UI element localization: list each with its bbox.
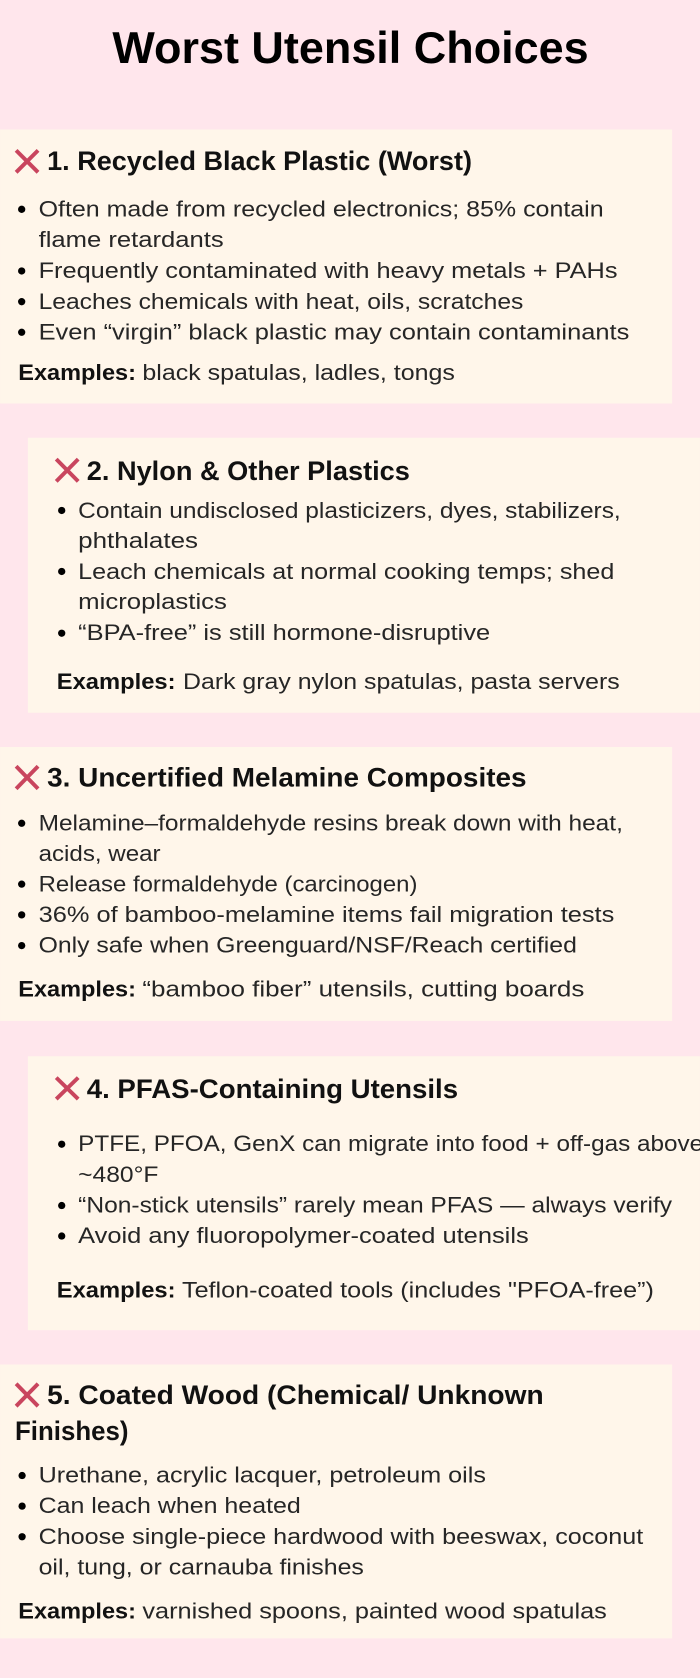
- panel: 5. coated wood: [0, 1364, 672, 1638]
- bullet list 5: Choose single-piece hardwood with beeswax, coconut: [39, 1524, 644, 1549]
- bullet list 3: Only safe when Greenguard/NSF/Reach certified: [39, 932, 577, 957]
- icon: red cross 4: [56, 1078, 78, 1099]
- heading 3: 3. Uncertified Melamine Composites: [47, 763, 527, 793]
- examples 1: [18, 360, 455, 385]
- heading 5: Finishes): [15, 1416, 128, 1446]
- heading 5: 5. Coated Wood (Chemical/ Unknown: [47, 1380, 544, 1410]
- icon: red cross 2: [56, 459, 78, 481]
- examples 3: Examples:: [18, 977, 136, 1002]
- icon: red cross 3: [16, 766, 38, 789]
- examples 5: varnished spoons, painted wood spatulas: [142, 1598, 607, 1623]
- panel: 2. nylon and other plastics: [28, 438, 700, 713]
- bullet list 5: oil, tung, or carnauba finishes: [39, 1555, 364, 1580]
- icon: red cross 1: [16, 150, 38, 172]
- bullet list 2: Leach chemicals at normal cooking temps; shed: [78, 559, 614, 584]
- bullet list 3: acids, wear: [39, 841, 161, 866]
- bullet list 3: Release formaldehyde (carcinogen): [39, 871, 417, 896]
- bullet list 4: Avoid any fluoropolymer-coated utensils: [78, 1223, 529, 1248]
- examples 3: “bamboo fiber” utensils, cutting boards: [142, 977, 584, 1002]
- panel: 3. uncertified melamine composites: [0, 747, 672, 1021]
- heading 5: [15, 1380, 544, 1446]
- bullet list 4: “Non-stick utensils” rarely mean PFAS — always verify: [78, 1192, 673, 1217]
- heading 1: 1. Recycled Black Plastic (Worst): [47, 146, 472, 176]
- bullet list 2: [58, 498, 621, 645]
- bullet list 1: Leaches chemicals with heat, oils, scratches: [39, 289, 523, 314]
- bullet list 3: [18, 810, 623, 957]
- bullet list 1: Often made from recycled electronics; 85% contain: [39, 197, 604, 222]
- bullet list 2: Contain undisclosed plasticizers, dyes, stabilizers,: [78, 498, 621, 523]
- examples 1: black spatulas, ladles, tongs: [142, 360, 455, 385]
- examples 2: Examples:: [57, 669, 176, 694]
- bullet list 2: microplastics: [78, 589, 227, 614]
- bullet list 1: Frequently contaminated with heavy metals + PAHs: [39, 258, 618, 283]
- bullet list 2: “BPA-free” is still hormone-disruptive: [78, 620, 490, 645]
- bullet list 5: Can leach when heated: [39, 1493, 301, 1518]
- examples 4: Teflon-coated tools (includes "PFOA-free”): [182, 1277, 654, 1302]
- bullet list 3: Melamine–formaldehyde resins break down with heat,: [39, 810, 623, 835]
- bullet list 4: [58, 1131, 700, 1248]
- title: Worst Utensil Choices: [112, 22, 589, 73]
- heading 4: 4. PFAS-Containing Utensils: [87, 1074, 458, 1104]
- bullet list 5: Urethane, acrylic lacquer, petroleum oils: [39, 1463, 486, 1488]
- bullet list 2: phthalates: [78, 528, 198, 553]
- bullet list 3: 36% of bamboo-melamine items fail migration tests: [39, 902, 614, 927]
- examples 3: [18, 977, 584, 1002]
- examples 4: Examples:: [57, 1277, 176, 1302]
- bullet list 1: Even “virgin” black plastic may contain contaminants: [39, 320, 629, 345]
- bullet list 5: [18, 1463, 644, 1580]
- examples 2: Dark gray nylon spatulas, pasta servers: [183, 669, 620, 694]
- heading 2: 2. Nylon & Other Plastics: [87, 456, 410, 486]
- bullet list 4: ~480°F: [78, 1162, 158, 1187]
- examples 5: Examples:: [18, 1598, 136, 1623]
- panel: 4. PFAS-containing utensils: [28, 1056, 700, 1330]
- bullet list 1: flame retardants: [39, 227, 224, 252]
- icon: red cross 5: [16, 1384, 38, 1406]
- examples 1: Examples:: [18, 360, 136, 385]
- bullet list 4: PTFE, PFOA, GenX can migrate into food + off-gas above: [78, 1131, 700, 1156]
- panel: 1. recycled black plastic: [0, 129, 672, 403]
- bullet list 1: [18, 197, 629, 345]
